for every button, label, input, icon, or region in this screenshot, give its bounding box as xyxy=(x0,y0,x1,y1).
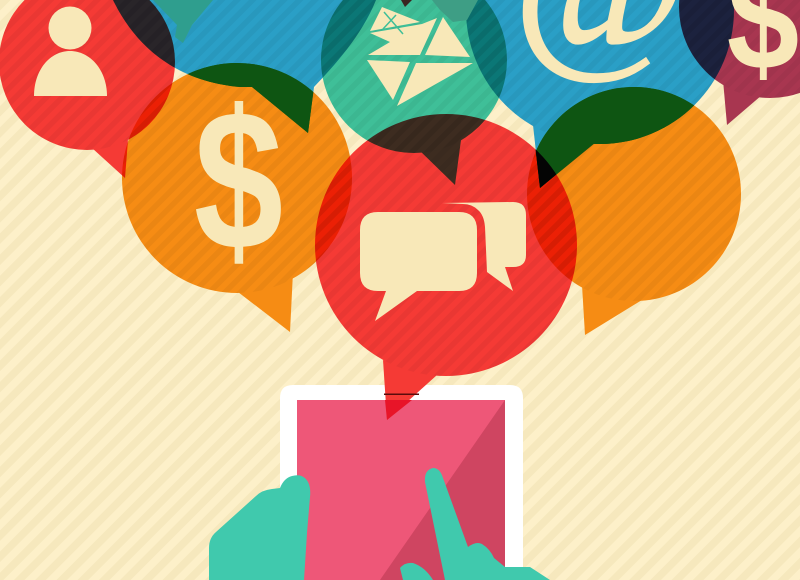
top-left bubble fragment xyxy=(153,0,213,43)
bubble: teal envelope xyxy=(321,0,507,185)
bubble: orange right xyxy=(527,87,741,335)
top-centre bubble fragment xyxy=(401,0,478,22)
bubble: blue left xyxy=(113,0,376,133)
bubble: person red xyxy=(0,0,175,178)
icon: person xyxy=(34,6,107,96)
overlap: orange over right blue xyxy=(536,87,694,188)
icon: envelope xyxy=(367,7,473,106)
speech bubbles xyxy=(0,0,800,420)
red bubble tail over tablet xyxy=(384,394,419,420)
bubble: blue at-sign xyxy=(466,0,734,188)
bubble: red chat xyxy=(315,114,577,420)
icon: chat bubbles xyxy=(360,202,526,321)
icon: dollar large: $ xyxy=(194,69,283,292)
bubble: orange left dollar xyxy=(122,63,352,332)
overlap: orange over left blue xyxy=(188,63,314,133)
right hand xyxy=(400,468,550,580)
bubble: maroon dollar xyxy=(679,0,800,125)
tablet xyxy=(280,385,523,580)
left hand xyxy=(209,475,310,580)
